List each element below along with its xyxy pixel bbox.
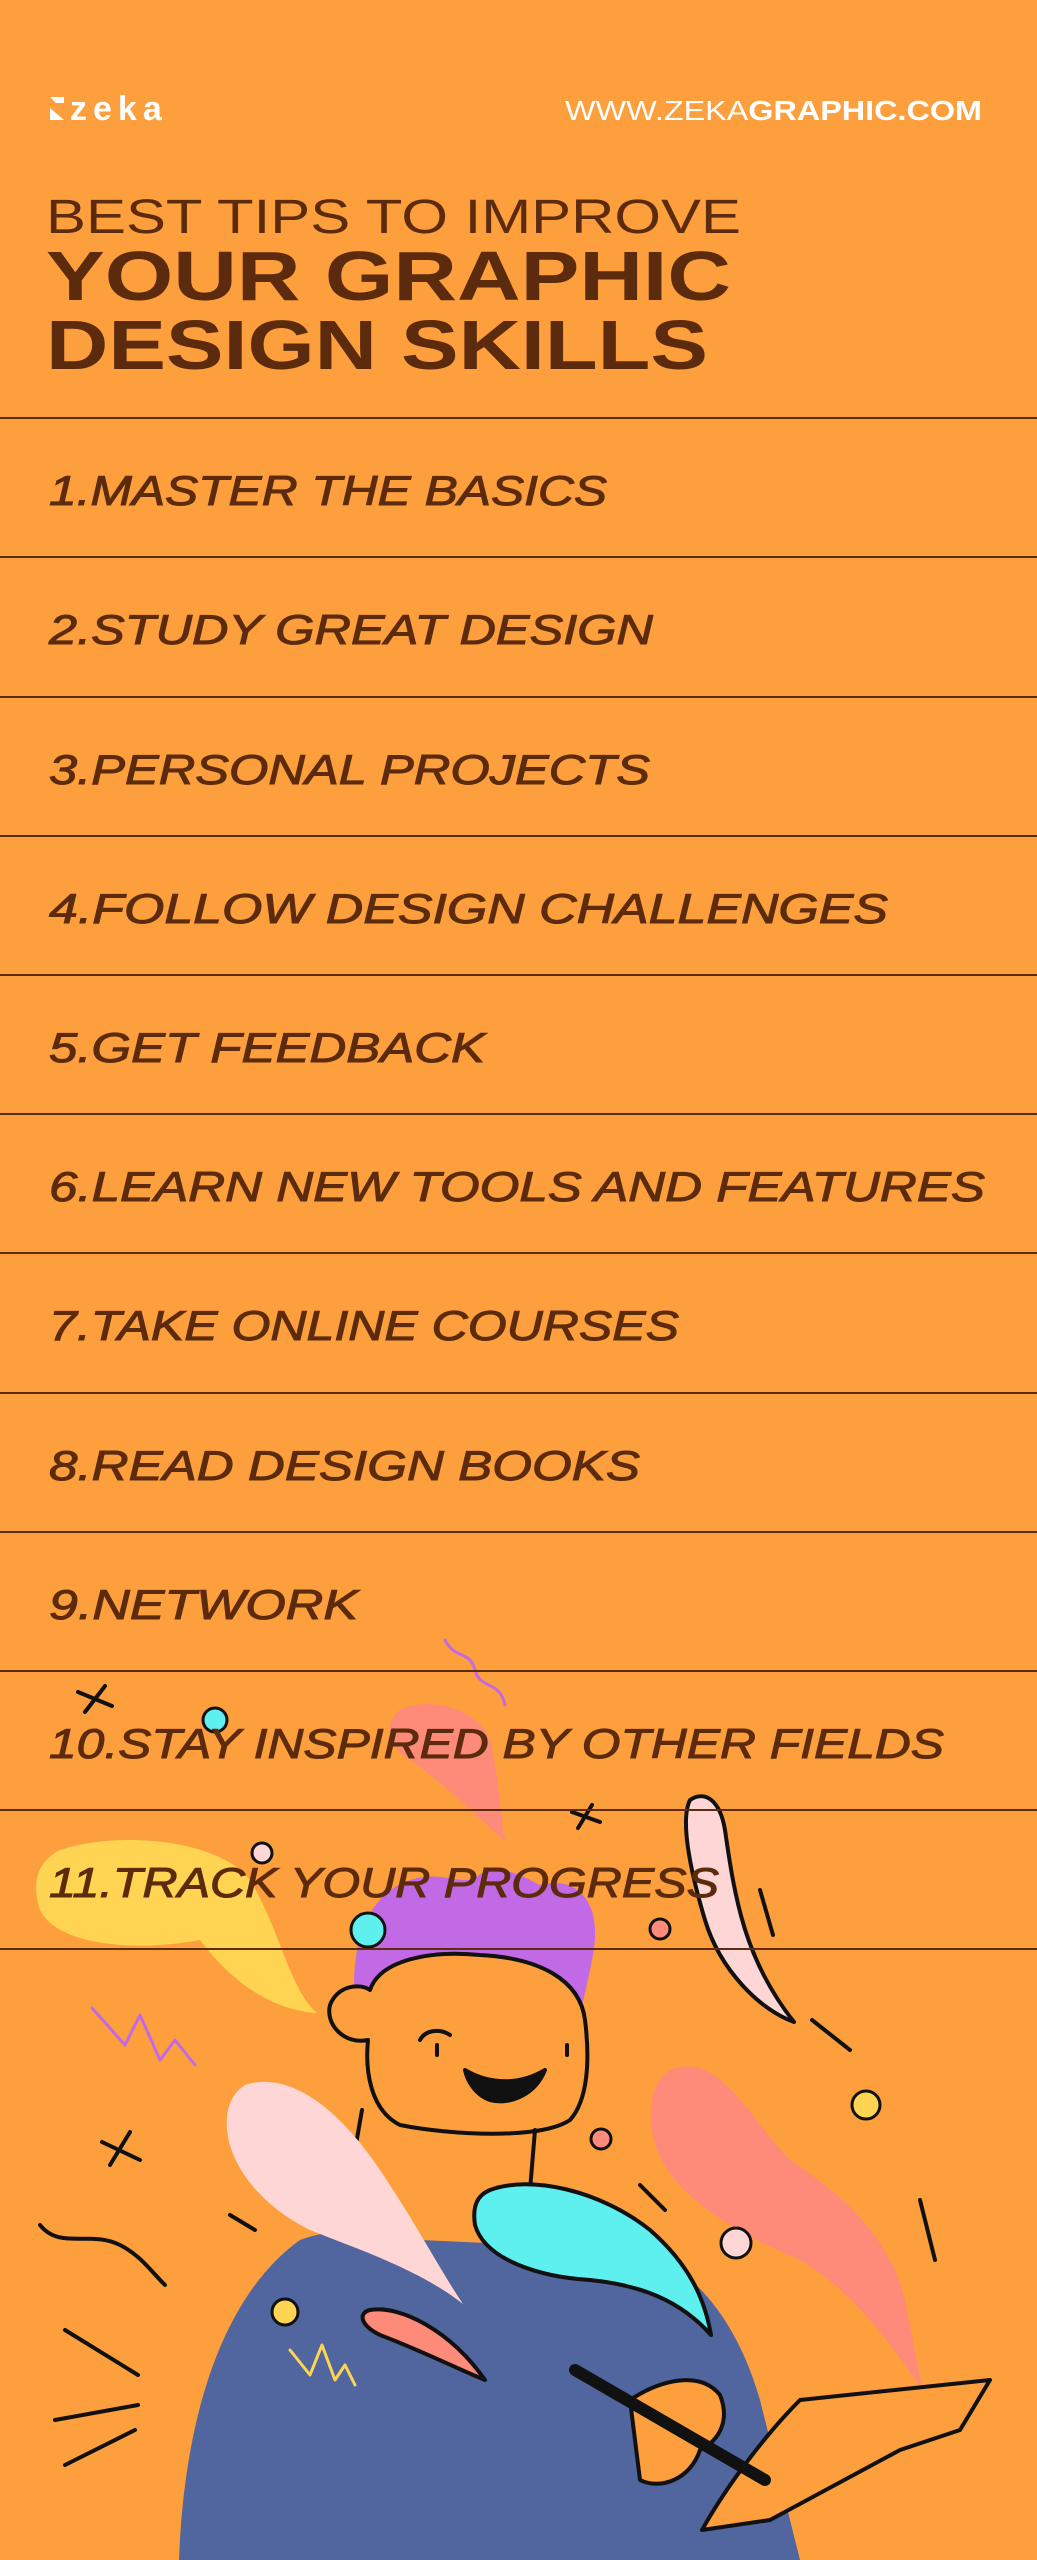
blob: cyan (474, 2184, 711, 2335)
squiggles (445, 1640, 505, 1705)
tips list: 4.FOLLOW DESIGN CHALLENGES (49, 885, 888, 932)
tips list: 8.READ DESIGN BOOKS (49, 1442, 640, 1489)
header: logo: zeka (70, 90, 168, 128)
tips list: 11.TRACK YOUR PROGRESS (49, 1859, 719, 1906)
tips list: 5.GET FEEDBACK (49, 1024, 487, 1071)
dots (203, 1708, 227, 1732)
title (46, 191, 741, 384)
tips list: 6.LEARN NEW TOOLS AND FEATURES (49, 1163, 985, 1210)
blob: light pink left (227, 2082, 463, 2304)
hand (630, 2380, 724, 2484)
title: YOUR GRAPHIC (46, 237, 731, 315)
blob: salmon right (651, 2066, 923, 2390)
tips list: 9.NETWORK (49, 1581, 360, 1628)
tips list: 10.STAY INSPIRED BY OTHER FIELDS (49, 1720, 944, 1767)
tips list: 1.MASTER THE BASICS (49, 467, 607, 514)
illustration: designer with tablet (36, 1640, 990, 2560)
dividers (0, 418, 1037, 1949)
header: website: WWW.ZEKA GRAPHIC.COM (565, 95, 982, 126)
tips list: 2.STUDY GREAT DESIGN (48, 606, 654, 653)
blob: yellow (36, 1840, 317, 2013)
blob: salmon top (390, 1704, 506, 1842)
shirt (179, 2231, 800, 2560)
pen (575, 2370, 765, 2480)
tips list: 3.PERSONAL PROJECTS (49, 746, 650, 793)
tablet (702, 2380, 990, 2530)
tips list (48, 467, 985, 1906)
blob: light pink tall (686, 1796, 794, 2022)
blob: salmon small (363, 2309, 485, 2380)
title: DESIGN SKILLS (46, 306, 708, 384)
tips list: 7.TAKE ONLINE COURSES (49, 1302, 679, 1349)
face (329, 1954, 587, 2134)
hair (354, 1870, 595, 2030)
title: BEST TIPS TO IMPROVE (46, 191, 741, 244)
